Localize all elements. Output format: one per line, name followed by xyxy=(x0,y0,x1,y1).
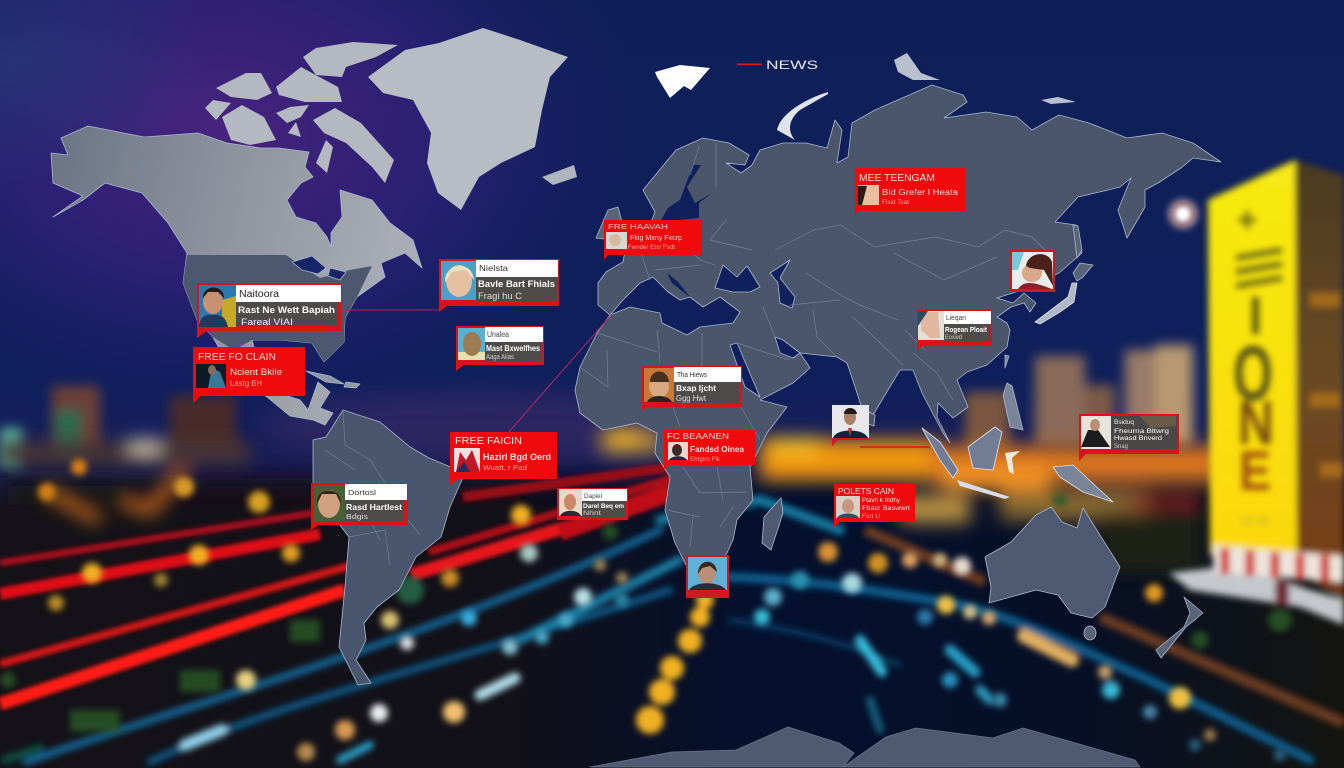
Sulawesi xyxy=(1005,451,1020,474)
background: brown roads xyxy=(865,530,1344,723)
Eurasia and Africa xyxy=(575,85,1221,590)
card: Atlantic headline two xyxy=(456,326,544,371)
icon: Svalbard islands xyxy=(894,53,940,80)
card: North America headline: Rast Ne Wett Bapiah xyxy=(238,305,335,316)
sun glare xyxy=(1168,199,1198,229)
Sri Lanka xyxy=(868,412,875,426)
card: Atlantic coast banner: Hazirl Bgd Oerd xyxy=(483,452,551,463)
card: Atlantic headline one xyxy=(439,259,559,312)
card: Southeast Asia headline: Snag xyxy=(1114,444,1128,450)
card: South America headline: Rasd Hartlest xyxy=(346,502,402,512)
Red Sea xyxy=(730,343,760,397)
card: South America headline: Dortosl xyxy=(348,488,376,497)
card: Mexico breaking banner: Ncient Bkile xyxy=(230,367,282,378)
card: North America headline xyxy=(197,283,342,338)
card: China headline: Eoxwd xyxy=(945,335,962,341)
United States xyxy=(183,255,372,362)
card: Indian Ocean banner: Ptavn k Ihdhy xyxy=(862,497,901,504)
background: blurred skyline xyxy=(0,345,1193,468)
card: Central Africa banner xyxy=(664,430,755,469)
card: Indian Ocean banner xyxy=(834,484,915,527)
heading: NEWS label: NEWS xyxy=(766,58,818,72)
card: Korea portrait xyxy=(1010,250,1055,292)
Iceland xyxy=(542,165,577,185)
card: South America headline xyxy=(311,483,408,530)
Great Lakes xyxy=(292,256,346,280)
Australia xyxy=(985,507,1120,618)
card: Atlantic headline one: Fragi hu C xyxy=(478,291,522,302)
card: Europe banner xyxy=(604,220,702,260)
card: India portrait xyxy=(832,405,869,446)
card: South America headline: Bdgis xyxy=(346,512,368,521)
heading: NEWS label xyxy=(737,58,818,72)
icon: Severnaya islands xyxy=(1041,97,1076,104)
map: country borders xyxy=(142,137,1055,565)
Caspian Sea xyxy=(770,260,795,308)
Caribbean xyxy=(306,371,360,388)
card: Russia banner: Bld Grefer l Heata xyxy=(882,188,959,197)
card: South Atlantic headline: Dapiel xyxy=(584,493,603,500)
card: Atlantic headline two: Unalea xyxy=(487,330,509,339)
card: Mexico breaking banner: FREE FO CLAIN xyxy=(198,351,276,363)
card: Central Africa banner: Ehtgiro Fik xyxy=(690,456,721,463)
card: Atlantic headline one: Nielsta xyxy=(479,263,508,273)
icon: arctic island xyxy=(655,65,710,98)
Madagascar xyxy=(762,498,783,550)
Java xyxy=(957,480,1010,499)
card: Atlantic headline one: Bavle Bart Fhials xyxy=(478,279,555,290)
yellow tower sign: O xyxy=(1233,329,1273,417)
card: Atlantic headline two: Aaga Alias xyxy=(486,354,514,361)
connector lines xyxy=(342,310,930,447)
New Zealand xyxy=(1156,597,1203,658)
card: West Africa headline: Tha Hiews xyxy=(677,370,707,379)
card: Atlantic coast banner: FREE FAICIN xyxy=(455,435,522,447)
card: China headline: Lieqan xyxy=(946,315,966,322)
Japan xyxy=(1035,283,1077,324)
card: Russia banner: MEE TEENGAM xyxy=(859,173,935,184)
background: blue light trails xyxy=(5,500,1310,762)
card: South Atlantic headline: Darel Beq em xyxy=(583,503,624,510)
card: Mexico breaking banner xyxy=(193,347,305,403)
card: Atlantic coast banner xyxy=(450,432,557,485)
Philippines and Taiwan xyxy=(1003,355,1023,430)
New Guinea xyxy=(1053,465,1113,502)
card: Europe banner: FRE HAAVAH xyxy=(608,222,668,231)
card: Mexico breaking banner: Lastg BH xyxy=(230,379,262,388)
yellow tower sign: E xyxy=(1239,439,1271,502)
card: Europe banner: Fkig Mxny Fxcrp xyxy=(630,233,682,242)
card: West Africa headline: Bxap Ijcht xyxy=(676,384,716,393)
card: Indian Ocean banner: Fbacr Baswwrt xyxy=(862,505,910,512)
background: ground plane xyxy=(0,478,1344,768)
yellow tower sign xyxy=(1169,160,1344,625)
background: glowing city band xyxy=(0,428,1220,572)
Borneo xyxy=(968,427,1002,470)
Mediterranean Sea xyxy=(610,277,740,335)
Antarctica edge xyxy=(590,727,1140,767)
Canadian Arctic islands xyxy=(205,42,398,183)
card: Southeast Asia headline: Fheurna Bltwrg xyxy=(1114,428,1169,435)
card: Atlantic coast banner: Wuatt, r Pad xyxy=(483,463,527,472)
yellow tower sign: 12 10 xyxy=(1241,512,1269,528)
card: North America headline: Naitoora xyxy=(239,289,279,300)
background: bokeh city lights xyxy=(38,459,1286,761)
card: Russia banner xyxy=(855,168,965,215)
Baltic Sea xyxy=(660,165,712,222)
card: West Africa headline: Ggg Hwt xyxy=(676,394,707,403)
North America xyxy=(51,126,422,425)
card: South Atlantic headline xyxy=(557,488,628,520)
card: Central Africa banner: Fandsd Oinea xyxy=(690,444,744,454)
card: South Atlantic headline: Nhnt xyxy=(583,511,601,517)
card: Southeast Asia headline: Hwasd Bnverd xyxy=(1114,435,1162,442)
card: China headline xyxy=(917,309,992,351)
Sakhalin xyxy=(1073,225,1082,258)
background: green glows xyxy=(0,493,1292,732)
Black Sea xyxy=(715,265,760,292)
Greenland xyxy=(368,28,568,210)
Adriatic Sea xyxy=(667,273,690,297)
Tasmania xyxy=(1084,626,1096,640)
South America xyxy=(313,410,465,685)
Britain xyxy=(596,207,622,240)
card: Southern Africa portrait xyxy=(686,555,729,598)
card: West Africa headline xyxy=(642,366,742,411)
Persian Gulf xyxy=(775,337,800,358)
card: Indian Ocean banner: POLETS CAIN xyxy=(838,487,894,496)
card: China headline: Rogean Ploait xyxy=(945,327,988,334)
background: red light streaks xyxy=(0,466,680,704)
card: Atlantic headline two: Mast Bxwelfhes xyxy=(486,344,540,353)
icon: crescent xyxy=(777,92,828,140)
card: Europe banner: Fwnder Etxr Fsdt xyxy=(628,244,675,251)
card: Indian Ocean banner: Fsrt U xyxy=(862,514,880,520)
card: Southeast Asia headline xyxy=(1079,414,1179,461)
card: Russia banner: Fisid Tsat xyxy=(882,199,909,206)
Sumatra xyxy=(922,428,958,478)
yellow tower sign: N xyxy=(1238,389,1274,458)
card: Central Africa banner: FC BEAANEN xyxy=(667,431,729,441)
card: North America headline: Fareal VIAI xyxy=(241,317,293,327)
yellow tower sign: + xyxy=(1236,199,1258,240)
card: Southeast Asia headline: Bsiduq xyxy=(1114,419,1134,426)
